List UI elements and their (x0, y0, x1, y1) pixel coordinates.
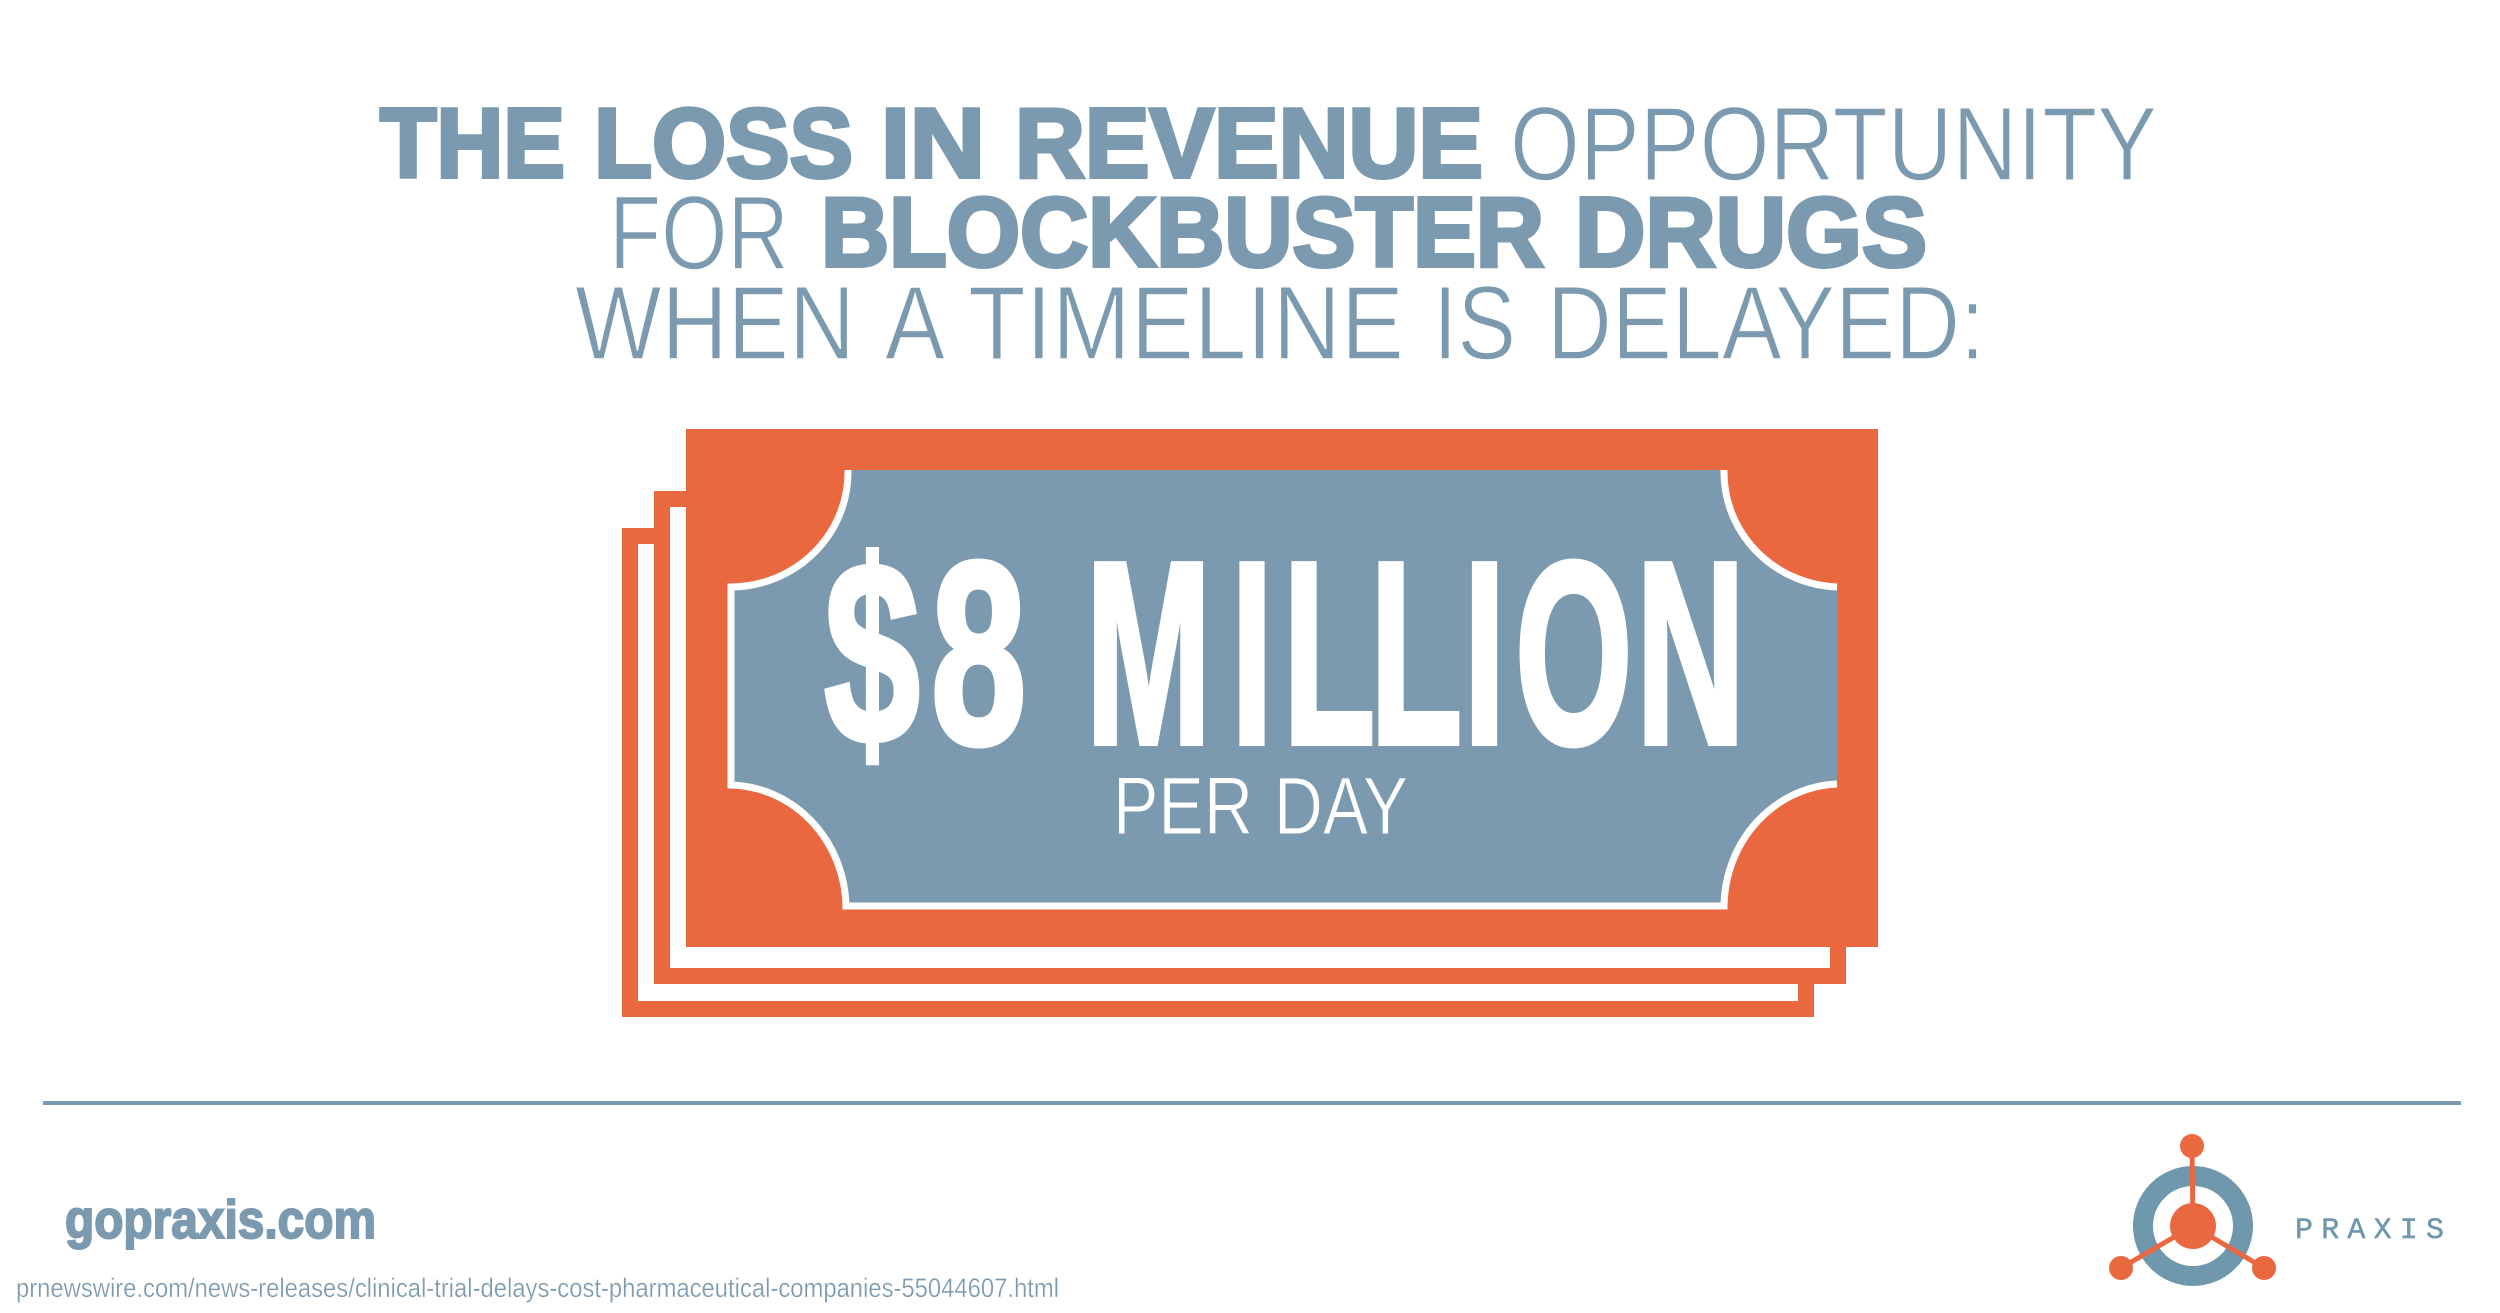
title line 3 light: TIMELINE (968, 265, 1404, 382)
logo ring (2143, 1176, 2243, 1276)
logo wordmark: PRAXIS (2295, 1214, 2444, 1248)
banknote white outline (731, 470, 1837, 906)
logo right dot (2252, 1256, 2276, 1280)
title line 1 bold: LOSS (594, 88, 853, 198)
divider (43, 1101, 2461, 1105)
per day: PER (1113, 761, 1253, 852)
title line 1 light: OPPORTUNITY (1510, 86, 2157, 203)
title line 1 bold (380, 88, 1483, 198)
back banknote (630, 536, 1806, 1009)
per day: DAY (1274, 761, 1408, 852)
title line 2 bold: BLOCKBUSTER (821, 177, 1544, 287)
title line 3 light: DELAYED: (1547, 265, 1985, 382)
big amount word: MILLION (1086, 509, 1745, 799)
website: gopraxis.com (65, 1190, 376, 1250)
logo spokes (2121, 1146, 2264, 1268)
title line 2 bold (821, 177, 1927, 287)
title line 2 bold: DRUGS (1575, 177, 1927, 287)
source url: prnewswire.com/news-releases/clinical-trial-delays-cost-pharmaceutical-companies-55044607.html (16, 1273, 1059, 1303)
logo (2109, 1134, 2276, 1280)
title line 3 light: A (885, 265, 945, 382)
title line 1 bold: THE (380, 88, 565, 198)
title line 2 light: FOR (609, 175, 789, 292)
title (380, 86, 2157, 382)
middle banknote (662, 499, 1838, 976)
title line 1 bold: REVENUE (1015, 88, 1483, 198)
title line 3 light: WHEN (575, 265, 855, 382)
title line 3 light: IS (1433, 265, 1516, 382)
per day (1113, 761, 1408, 852)
logo top dot (2180, 1134, 2204, 1158)
title line 1 bold: IN (881, 88, 985, 198)
logo centre dot (2170, 1203, 2216, 1249)
big amount: $8 (824, 508, 1026, 798)
front banknote (686, 429, 1878, 947)
banknote stack (630, 429, 1878, 1009)
title line 3 light (575, 265, 1985, 382)
banknote blue centre panel (733, 470, 1837, 906)
logo left dot (2109, 1256, 2133, 1280)
banknote white top right arc (1724, 470, 1837, 587)
